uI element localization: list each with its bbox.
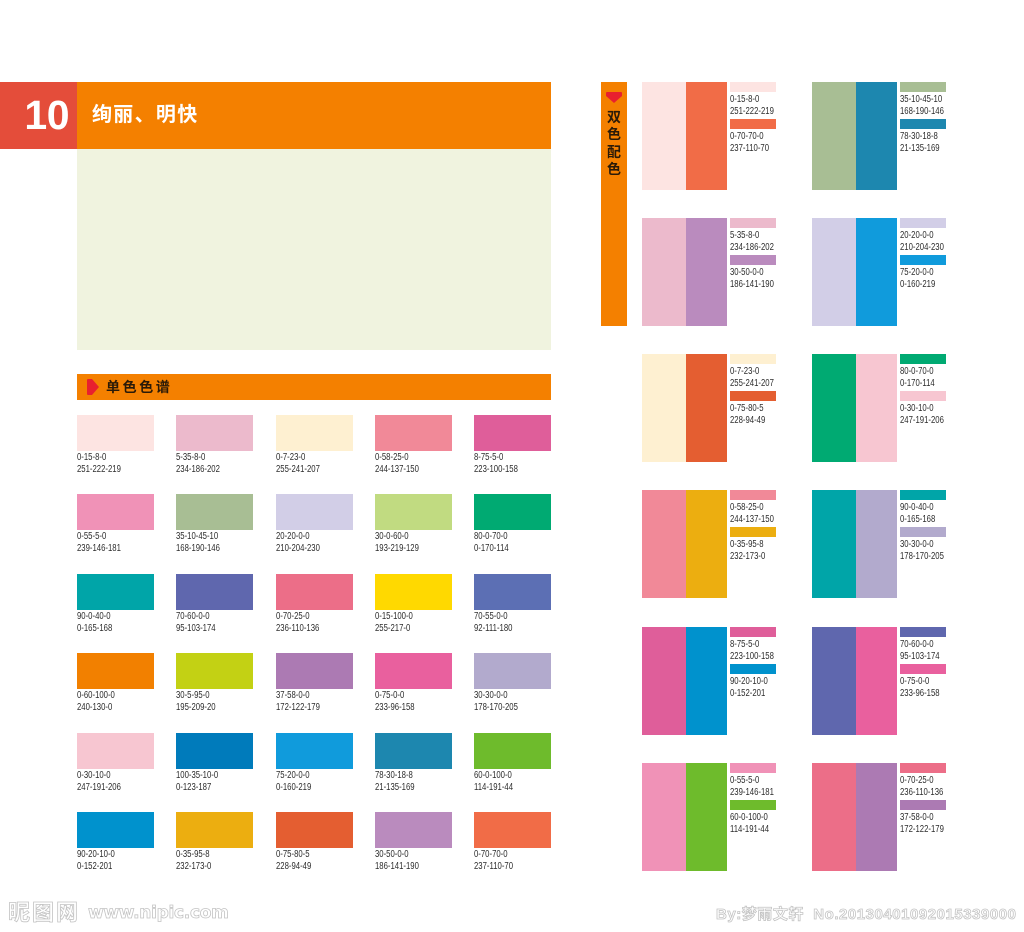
swatch 3-1: 0-165-168: [77, 623, 112, 634]
colour pair B6: [812, 763, 1024, 871]
colour pair A2: 234-186-202: [730, 242, 774, 253]
image placeholder panel: [77, 149, 551, 350]
swatch 3-5: 70-55-0-0: [474, 611, 508, 622]
colour pair B2: 75-20-0-0: [900, 267, 934, 278]
swatch 3-2: [176, 574, 253, 634]
swatch 1-3: 0-7-23-0: [276, 452, 305, 463]
title number block: 10: [24, 92, 69, 138]
colour pair B6: 172-122-179: [900, 824, 944, 835]
swatch 3-2: 70-60-0-0: [176, 611, 210, 622]
colour pair B2: 20-20-0-0: [900, 230, 934, 241]
swatch 1-1: [77, 415, 154, 475]
swatch 5-2: 0-123-187: [176, 782, 211, 793]
swatch 3-4: 255-217-0: [375, 623, 410, 634]
swatch 2-3: 20-20-0-0: [276, 531, 309, 542]
swatch 5-5: 114-191-44: [474, 782, 513, 793]
swatch 1-3: [276, 415, 353, 475]
watermark left: 昵图网: [8, 900, 80, 925]
watermark right: By:梦雨文轩 No.20130401092015339000: [716, 906, 1016, 923]
colour pair A1: 0-70-70-0: [730, 131, 764, 142]
swatch 5-2: [176, 733, 253, 793]
swatch 2-3: 210-204-230: [276, 543, 319, 554]
colour pair B4: 0-165-168: [900, 514, 935, 525]
section heading text vertical: 色: [607, 161, 621, 177]
swatch 1-2: [176, 415, 253, 475]
colour pair A2: 30-50-0-0: [730, 267, 764, 278]
swatch 4-5: 30-30-0-0: [474, 690, 508, 701]
swatch 1-5: 223-100-158: [474, 464, 518, 475]
colour pair A1: 0-15-8-0: [730, 94, 759, 105]
swatch 1-3: 255-241-207: [276, 464, 319, 475]
colour pair B3: 247-191-206: [900, 415, 944, 426]
colour pair A5: 223-100-158: [730, 651, 774, 662]
swatch 3-4: [375, 574, 452, 634]
colour pair B4: 30-30-0-0: [900, 539, 934, 550]
swatch 4-3: 37-58-0-0: [276, 690, 309, 701]
swatch 3-2: 95-103-174: [176, 623, 216, 634]
colour pair A4: 0-35-95-8: [730, 539, 764, 550]
section heading text vertical: 色: [607, 126, 621, 142]
swatch 2-4: 193-219-129: [375, 543, 419, 554]
colour pair A6: 239-146-181: [730, 787, 774, 798]
swatch 1-4: 0-58-25-0: [375, 452, 409, 463]
swatch 4-1: [77, 653, 154, 713]
section heading text vertical: [607, 109, 621, 177]
swatch 3-1: [77, 574, 154, 634]
colour pair A1: 237-110-70: [730, 143, 769, 154]
swatch 2-2: 168-190-146: [176, 543, 220, 554]
swatch 3-1: 90-0-40-0: [77, 611, 111, 622]
colour pair A3: [642, 354, 776, 462]
colour pair A3: 228-94-49: [730, 415, 765, 426]
swatch 3-3: 0-70-25-0: [276, 611, 309, 622]
colour pair B1: 21-135-169: [900, 143, 940, 154]
swatch 2-5: 80-0-70-0: [474, 531, 508, 542]
swatch 5-3: 0-160-219: [276, 782, 311, 793]
swatch 5-4: 21-135-169: [375, 782, 415, 793]
title banner: [77, 82, 551, 149]
swatch 4-4: 0-75-0-0: [375, 690, 404, 701]
swatch 1-5: 8-75-5-0: [474, 452, 503, 463]
colour pair A6: 60-0-100-0: [730, 812, 768, 823]
colour pair A4: 244-137-150: [730, 514, 774, 525]
swatch 3-3: 236-110-136: [276, 623, 319, 634]
section header: single colour: [77, 374, 551, 400]
swatch 4-5: 178-170-205: [474, 702, 518, 713]
swatch 6-3: 228-94-49: [276, 861, 311, 872]
swatch 6-1: 0-152-201: [77, 861, 112, 872]
swatch 2-4: 30-0-60-0: [375, 531, 409, 542]
swatch 1-1: 251-222-219: [77, 464, 121, 475]
colour pair B5: 70-60-0-0: [900, 639, 934, 650]
swatch 6-4: 30-50-0-0: [375, 849, 409, 860]
swatch 3-4: 0-15-100-0: [375, 611, 413, 622]
colour pair A5: 90-20-10-0: [730, 676, 768, 687]
swatch 4-1: 240-130-0: [77, 702, 112, 713]
colour pair B3: 0-30-10-0: [900, 403, 934, 414]
section sidebar: two colour: [601, 82, 627, 326]
colour pair A1: [642, 82, 776, 190]
colour pair B4: 90-0-40-0: [900, 502, 934, 513]
watermark left: [8, 900, 230, 926]
swatch 6-1: 90-20-10-0: [77, 849, 115, 860]
swatch 5-5: 60-0-100-0: [474, 770, 512, 781]
section heading text: 单色色谱: [106, 379, 172, 395]
swatch 5-2: 100-35-10-0: [176, 770, 218, 781]
swatch 2-2: [176, 494, 253, 554]
colour pair B5: 233-96-158: [900, 688, 940, 699]
swatch 3-5: 92-111-180: [474, 623, 512, 634]
swatch 2-4: [375, 494, 452, 554]
swatch 2-1: [77, 494, 154, 554]
colour pair B1: [812, 82, 946, 190]
colour pair A4: [642, 490, 776, 598]
colour pair A3: 255-241-207: [730, 378, 774, 389]
swatch 1-4: 244-137-150: [375, 464, 419, 475]
colour pair A2: [642, 218, 776, 326]
colour pair B3: 80-0-70-0: [900, 366, 934, 377]
colour pair A2: 186-141-190: [730, 279, 774, 290]
colour pair B4: [812, 490, 1024, 598]
title number block: [0, 82, 77, 149]
swatch 5-4: [375, 733, 452, 793]
colour pair A2: 5-35-8-0: [730, 230, 759, 241]
swatch 4-1: 0-60-100-0: [77, 690, 115, 701]
swatch 6-4: [375, 812, 452, 872]
swatch 2-3: [276, 494, 353, 554]
swatch 6-2: 232-173-0: [176, 861, 211, 872]
swatch 6-1: [77, 812, 154, 872]
icon: red arrow right: [87, 379, 99, 395]
swatch 4-3: 172-122-179: [276, 702, 319, 713]
section heading text vertical: 双: [607, 109, 621, 125]
colour pair A5: 0-152-201: [730, 688, 765, 699]
colour pair B5: [812, 627, 1024, 735]
swatch 2-5: 0-170-114: [474, 543, 509, 554]
swatch 2-1: 0-55-5-0: [77, 531, 106, 542]
swatch 6-3: [276, 812, 353, 872]
swatch 5-1: 247-191-206: [77, 782, 121, 793]
colour pair A5: [642, 627, 776, 735]
watermark left: www.nipic.com: [88, 903, 229, 923]
swatch 3-3: [276, 574, 353, 634]
swatch 4-5: [474, 653, 551, 713]
colour pair B2: 0-160-219: [900, 279, 935, 290]
colour pair A4: 0-58-25-0: [730, 502, 764, 513]
colour pair B6: 236-110-136: [900, 787, 943, 798]
swatch 3-5: [474, 574, 551, 634]
swatch 5-3: [276, 733, 353, 793]
swatch 6-2: [176, 812, 253, 872]
colour pair A4: 232-173-0: [730, 551, 765, 562]
colour pair B2: [812, 218, 1024, 326]
colour pair B4: 178-170-205: [900, 551, 944, 562]
swatch 5-3: 75-20-0-0: [276, 770, 309, 781]
title banner: 绚丽、明快: [92, 104, 198, 126]
swatch 4-4: 233-96-158: [375, 702, 415, 713]
swatch 4-2: 195-209-20: [176, 702, 216, 713]
swatch 2-1: 239-146-181: [77, 543, 121, 554]
colour pair B3: [812, 354, 1024, 462]
colour pair B1: 78-30-18-8: [900, 131, 938, 142]
colour pair B5: 95-103-174: [900, 651, 940, 662]
swatch 5-5: [474, 733, 551, 793]
colour pair B5: 0-75-0-0: [900, 676, 929, 687]
colour pair A6: 0-55-5-0: [730, 775, 759, 786]
colour pair B2: 210-204-230: [900, 242, 944, 253]
colour pair A6: [642, 763, 776, 871]
swatch 2-2: 35-10-45-10: [176, 531, 218, 542]
swatch 5-4: 78-30-18-8: [375, 770, 413, 781]
icon: red arrow down: [606, 92, 622, 103]
swatch 6-5: 237-110-70: [474, 861, 513, 872]
swatch 4-4: [375, 653, 452, 713]
swatch 6-2: 0-35-95-8: [176, 849, 210, 860]
swatch 1-2: 5-35-8-0: [176, 452, 205, 463]
swatch 6-3: 0-75-80-5: [276, 849, 309, 860]
swatch 4-3: [276, 653, 353, 713]
colour pair B1: 168-190-146: [900, 106, 944, 117]
colour pair B3: 0-170-114: [900, 378, 935, 389]
swatch 4-2: [176, 653, 253, 713]
colour pair B1: 35-10-45-10: [900, 94, 942, 105]
swatch 2-5: [474, 494, 551, 554]
colour pair A3: 0-7-23-0: [730, 366, 759, 377]
swatch 1-1: 0-15-8-0: [77, 452, 106, 463]
colour pair B6: 0-70-25-0: [900, 775, 934, 786]
swatch 1-4: [375, 415, 452, 475]
section heading text vertical: 配: [607, 144, 621, 160]
swatch 4-2: 30-5-95-0: [176, 690, 210, 701]
swatch 5-1: [77, 733, 154, 793]
colour pair A1: 251-222-219: [730, 106, 774, 117]
swatch 1-5: [474, 415, 551, 475]
colour pair A3: 0-75-80-5: [730, 403, 764, 414]
colour pair A5: 8-75-5-0: [730, 639, 759, 650]
swatch 6-4: 186-141-190: [375, 861, 419, 872]
swatch 1-2: 234-186-202: [176, 464, 220, 475]
swatch 6-5: [474, 812, 551, 872]
colour pair B6: 37-58-0-0: [900, 812, 934, 823]
colour pair A6: 114-191-44: [730, 824, 769, 835]
swatch 5-1: 0-30-10-0: [77, 770, 111, 781]
swatch 6-5: 0-70-70-0: [474, 849, 508, 860]
